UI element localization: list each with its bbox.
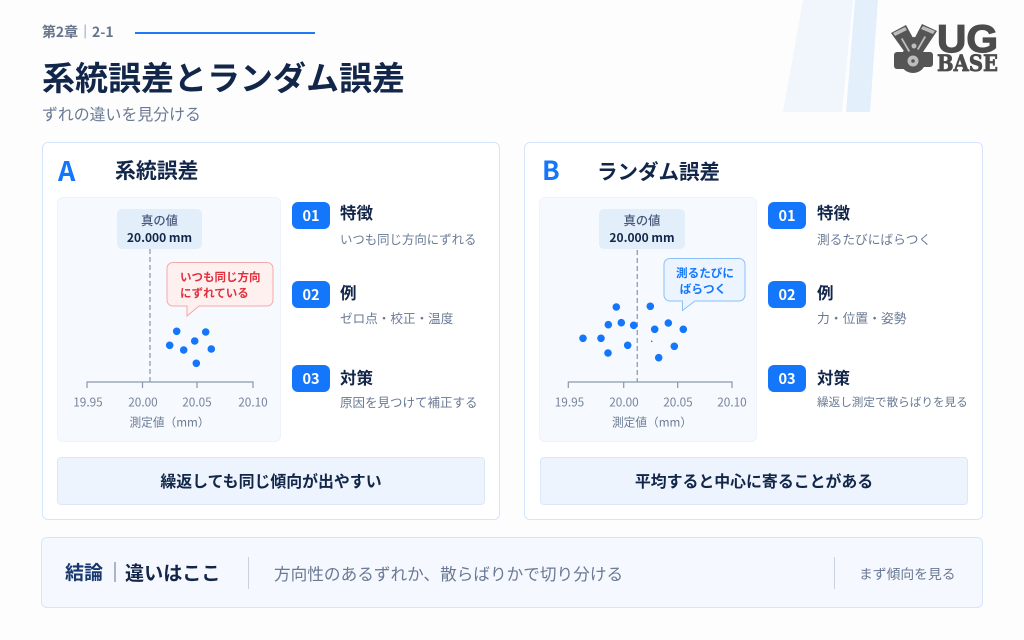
takeaway B: 平均すると中心に寄ることがある	[635, 469, 873, 492]
item A02	[292, 280, 453, 327]
subtitle: ずれの違いを見分ける	[42, 102, 201, 125]
true value label B: 真の値	[624, 210, 660, 228]
dot plot B	[555, 250, 747, 430]
dot plot B: 19.95	[555, 394, 584, 410]
title: 系統誤差とランダム誤差	[42, 52, 405, 100]
dot plot B: 20.10	[717, 394, 747, 410]
takeaway A: 繰返しても同じ傾向が出やすい	[160, 469, 382, 492]
item B01: 01	[778, 205, 796, 226]
item A01: 01	[302, 205, 320, 226]
takeaway A	[57, 457, 485, 505]
item B02: 力・位置・姿勢	[817, 308, 907, 327]
chart B	[539, 197, 757, 442]
chapter label: 第2章｜2-1	[42, 22, 114, 42]
takeaway B	[540, 457, 968, 505]
item B03: 繰返し測定で散らばりを見る	[817, 394, 968, 410]
true value label B: 20.000 mm	[609, 228, 675, 246]
dot plot A: 測定値（mm）	[129, 414, 210, 430]
dot plot A: 19.95	[73, 394, 103, 410]
conclusion text: 方向性のあるずれか、散らばりかで切り分ける	[274, 561, 623, 585]
dot plot A: 20.05	[182, 394, 212, 410]
item A01: いつも同じ方向にずれる	[340, 230, 476, 248]
dot plot A: 20.10	[238, 394, 268, 410]
item B02: 例	[817, 280, 834, 304]
conclusion heading: 違いはここ	[125, 558, 220, 586]
true value label A	[117, 209, 202, 249]
dot plot B: 測定値（mm）	[612, 414, 692, 430]
chart A	[57, 197, 281, 442]
item A03: 03	[302, 368, 320, 389]
item A02: ゼロ点・校正・温度	[340, 308, 453, 327]
heading B: ランダム誤差	[597, 155, 720, 185]
dot plot A: 20.00	[128, 394, 158, 410]
item A02: 02	[302, 284, 320, 305]
item B03: 対策	[817, 365, 850, 389]
item B03: 03	[778, 368, 796, 389]
item A03	[292, 365, 478, 411]
item B01: 測るたびにばらつく	[817, 229, 931, 248]
dot plot B: 測るたびに	[676, 265, 734, 281]
item B02: 02	[778, 284, 796, 305]
item A01	[292, 200, 476, 248]
letter B: B	[542, 151, 560, 188]
item B02	[768, 280, 907, 327]
dot plot A: にずれている	[180, 285, 249, 301]
item A02: 例	[340, 280, 356, 304]
letter A: A	[58, 150, 75, 189]
conclusion label: 結論	[65, 558, 103, 585]
conclusion separator	[114, 562, 116, 582]
panel: A systematic error	[42, 142, 500, 520]
item B01: 特徴	[817, 200, 850, 224]
dot plot B: 20.05	[663, 394, 693, 410]
conclusion bar	[41, 537, 983, 608]
next step note: まず傾向を見る	[859, 563, 956, 583]
dot plot B: 20.00	[609, 394, 639, 410]
true value label A: 真の値	[141, 210, 178, 228]
item B01	[768, 200, 931, 248]
dot plot A: いつも同じ方向	[180, 269, 260, 285]
dot plot B: ばらつく	[680, 281, 726, 297]
panel: B random error	[524, 142, 983, 520]
divider right	[834, 557, 835, 589]
true value label B	[599, 209, 685, 249]
item A01: 特徴	[340, 200, 373, 224]
heading A: 系統誤差	[115, 155, 199, 185]
dot plot A	[73, 249, 274, 430]
item A03: 原因を見つけて補正する	[340, 392, 478, 411]
true value label A: 20.000 mm	[127, 228, 192, 246]
item B03	[768, 365, 968, 410]
divider left	[248, 557, 249, 589]
logo: UG BASE	[891, 22, 998, 74]
accent rule	[135, 32, 315, 34]
item A03: 対策	[340, 365, 373, 389]
